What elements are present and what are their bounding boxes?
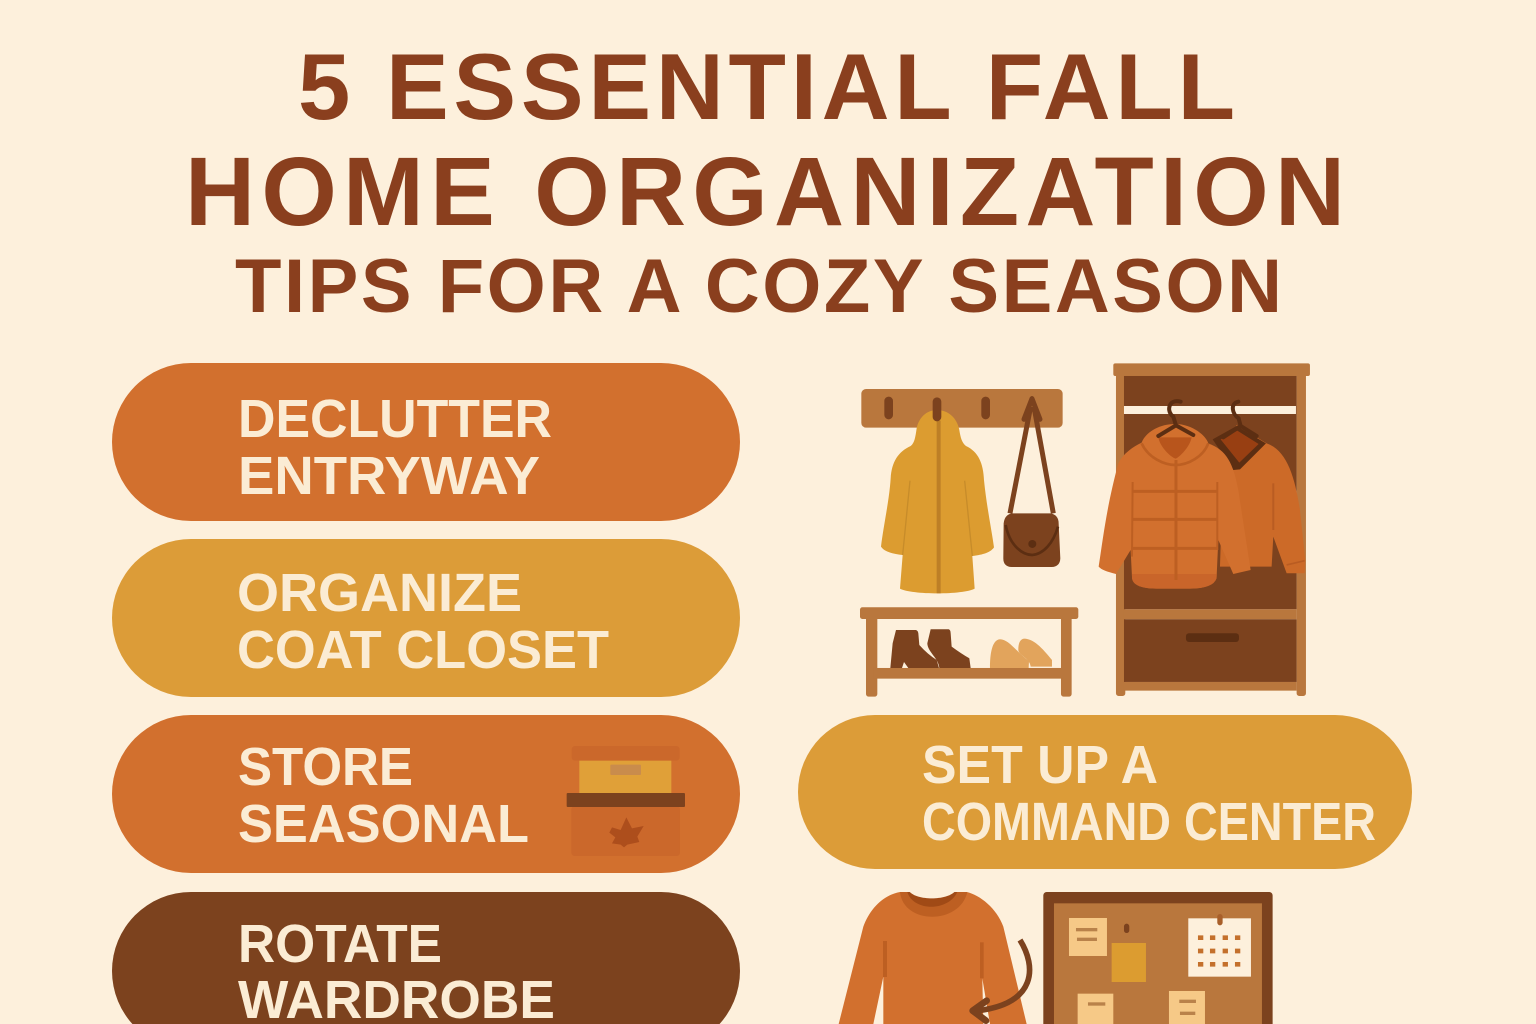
panel: organize coat closet: [112, 539, 740, 697]
title: 5 ESSENTIAL FALL: [298, 34, 1235, 139]
calendar: [1188, 914, 1251, 977]
panel: rotate wardrobe: [112, 892, 740, 1024]
panel: store seasonal: SEASONAL: [238, 794, 529, 854]
panel: store seasonal: STORE: [238, 737, 413, 797]
icon: shoulder bag: [1003, 399, 1060, 567]
icon: shoe bench: [860, 607, 1078, 697]
icon: sweater: [839, 891, 1030, 1024]
note 2: [1078, 994, 1113, 1024]
panel: declutter entryway: DECLUTTER: [238, 389, 552, 449]
panel: set up a command center: COMMAND CENTER: [922, 792, 1376, 852]
icon: wardrobe with jackets: [1099, 363, 1310, 696]
front puffer jacket: [1099, 401, 1251, 589]
title: HOME ORGANIZATION: [185, 137, 1345, 246]
pin: [1124, 924, 1129, 933]
icon: corkboard: [1043, 892, 1273, 1024]
icon: entryway rack, coat, bag and bench: [860, 389, 1078, 697]
title: [185, 34, 1345, 329]
arrow: rotate into wardrobe: [973, 940, 1030, 1021]
panel: declutter entryway: ENTRYWAY: [238, 446, 540, 506]
icon: wall peg rack: [861, 389, 1063, 428]
panel: declutter entryway: [112, 363, 740, 521]
panel: rotate wardrobe: ROTATE: [238, 914, 442, 974]
note 3: [1169, 991, 1205, 1024]
panel: set up a command center: SET UP A: [922, 735, 1158, 795]
panel: store seasonal: [112, 715, 740, 873]
panel: set up a command center: [798, 715, 1412, 869]
title: TIPS FOR A COZY SEASON: [235, 244, 1282, 329]
note 1: [1069, 918, 1107, 956]
panel: organize coat closet: ORGANIZE: [237, 563, 522, 623]
icon: yellow raincoat: [881, 397, 994, 593]
panel: organize coat closet: COAT CLOSET: [237, 620, 609, 680]
icon: storage boxes: [567, 746, 685, 856]
yellow note: [1112, 943, 1146, 982]
back jacket: [1213, 402, 1305, 573]
wardrobe frame: [1113, 363, 1310, 696]
